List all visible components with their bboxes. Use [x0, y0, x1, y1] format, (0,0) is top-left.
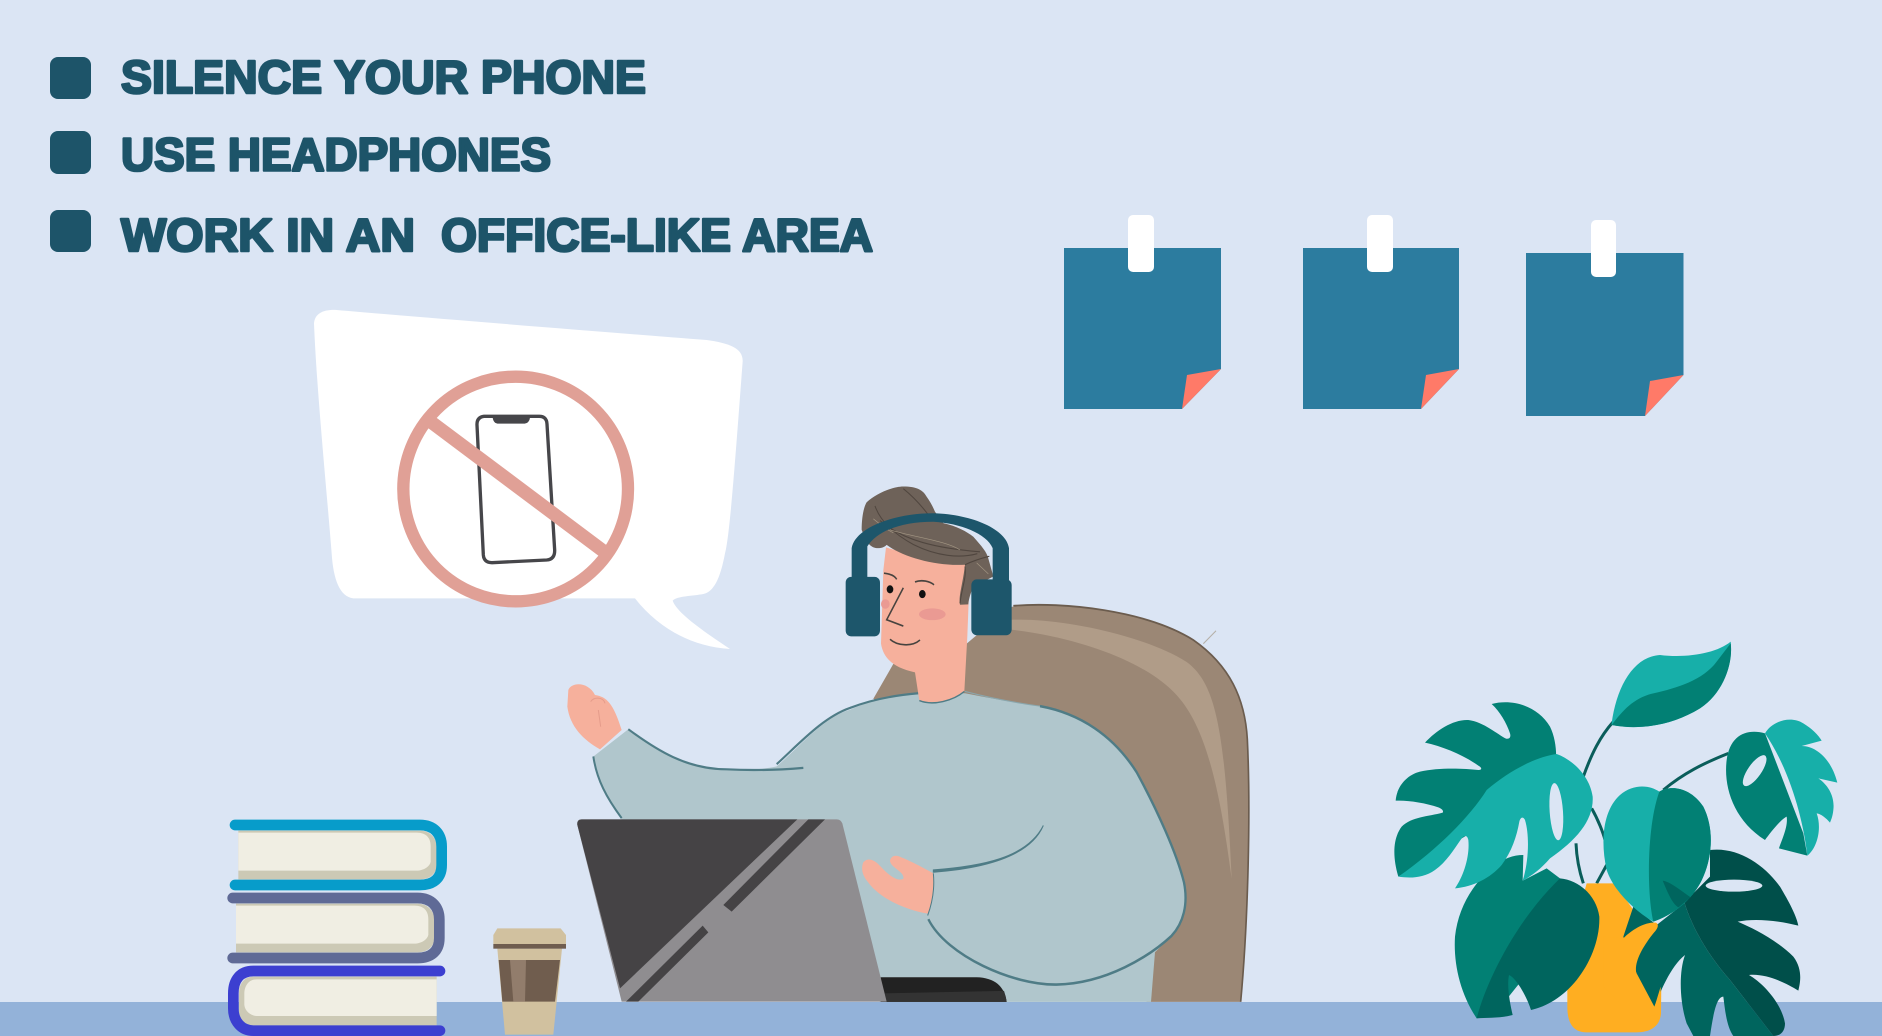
headphones [846, 513, 1012, 636]
face and neck [881, 547, 970, 703]
yellow pot [1567, 883, 1662, 1032]
leaf: right monstera [1726, 720, 1837, 856]
potted plant [1394, 642, 1837, 1036]
leaf: upper left monstera [1394, 702, 1593, 888]
note 2 [1303, 215, 1459, 409]
note 1 [1064, 215, 1221, 409]
hair [862, 486, 993, 605]
chair [873, 605, 1249, 1002]
stems [1576, 722, 1728, 883]
item: silence your phone: SILENCE YOUR PHONE [121, 51, 646, 103]
laptop and raised hand [567, 684, 887, 1002]
book: top [235, 825, 442, 885]
person wearing headphones [593, 486, 1186, 1002]
leaf: lower left [1455, 855, 1599, 1018]
note 3 [1526, 220, 1684, 416]
item: use headphones: USE HEADPHONES [121, 128, 551, 180]
coffee cup [493, 928, 566, 1035]
leaf: top [1612, 642, 1731, 727]
leaf: center [1603, 786, 1711, 922]
book: middle [233, 898, 439, 958]
item: work in an office-like area: WORK IN AN [121, 209, 415, 261]
book: bottom [233, 971, 440, 1031]
item: work in an office-like area [50, 209, 873, 261]
leaf: lower right [1623, 850, 1800, 1036]
icon: prohibition sign [403, 377, 628, 601]
laptop [577, 819, 887, 1002]
item: work in an office-like area: OFFICE-LIKE AREA [441, 209, 873, 261]
pot highlight over leaf [1603, 923, 1661, 1020]
trousers [881, 977, 1007, 1002]
checklist [50, 51, 873, 261]
right hand [862, 856, 934, 914]
sticky notes [1064, 215, 1684, 416]
left hand [567, 684, 622, 749]
desk surface [0, 1002, 1882, 1036]
stack of books [233, 825, 442, 1031]
sweater [593, 691, 1186, 1002]
speech bubble with no-phone sign [314, 310, 743, 649]
icon: phone [477, 416, 555, 563]
